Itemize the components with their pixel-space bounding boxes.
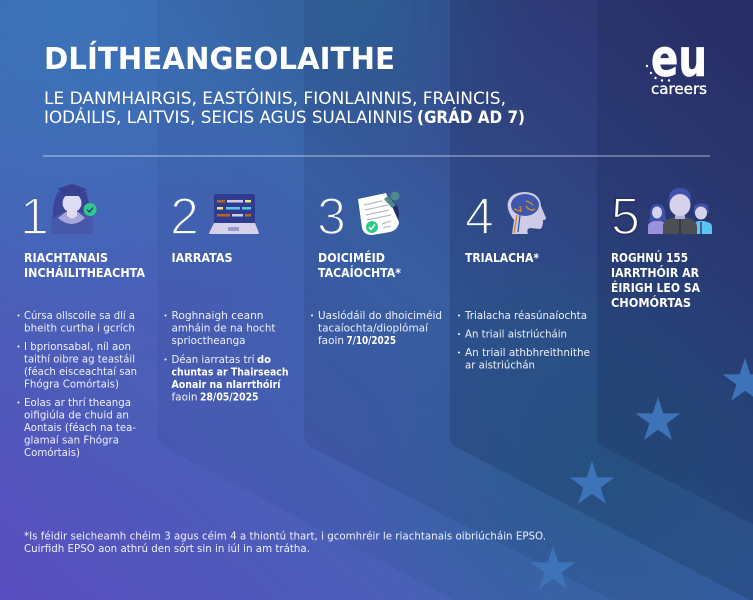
list: step 1: glamaí san Fhógra	[24, 434, 119, 446]
footnote: Cuirfidh EPSO aon athrú den sórt sin in iúl in am trátha.	[24, 543, 310, 555]
subtitle: LE DANMHAIRGIS, EASTÓINIS, FIONLAINNIS, FRAINCIS,	[44, 89, 506, 108]
list: step 3: faoin	[318, 335, 344, 347]
list: step 2: chuntas ar Thairseach	[172, 366, 288, 378]
step 2	[164, 188, 288, 404]
icon: head with brain	[508, 192, 546, 234]
number 2: 2	[170, 188, 199, 246]
list: step 1: Eolas ar thrí theanga	[24, 397, 131, 409]
heading: roghnú: IARRTHÓIR AR	[611, 265, 699, 280]
list: step 3: Uaslódáil do dhoiciméid	[318, 310, 442, 322]
footnote	[24, 530, 546, 555]
title: DLÍTHEANGEOLAITHE	[44, 41, 395, 77]
heading: doiciméid	[318, 250, 402, 280]
star 3	[570, 461, 614, 504]
list: step 3: 7/10/2025	[346, 335, 396, 347]
list: step 2: Déan iarratas trí	[172, 354, 256, 366]
logo: eu careers	[646, 29, 707, 98]
heading: riachtanais: INCHÁILITHEACHTA	[24, 265, 146, 280]
step 3	[311, 188, 442, 347]
list: step 3	[311, 310, 442, 347]
subtitle: IODÁILIS, LAITVIS, SEICIS AGUS SUALAINNIS	[44, 108, 413, 127]
logo: eu careers: eu	[651, 29, 707, 89]
heading: doiciméid: TACAÍOCHTA*	[318, 265, 402, 280]
subtitle: (GRÁD AD 7)	[417, 108, 525, 127]
icon: three people	[648, 188, 712, 234]
panel: column shade 2	[157, 0, 753, 600]
step 5	[611, 188, 712, 310]
list: step 1: (féach eisceachtaí san	[24, 366, 137, 378]
heading: trialacha: TRIALACHA*	[465, 251, 540, 265]
panel: column shade 4	[450, 0, 753, 600]
list: step 1: Aontais (féach na tea-	[24, 422, 136, 434]
number 3: 3	[317, 188, 346, 246]
list: step 1: oifigiúla de chuid an	[24, 410, 129, 422]
list: step 1: bheith curtha i gcrích	[24, 322, 135, 334]
heading: doiciméid: DOICIMÉID	[318, 250, 385, 265]
heading: roghnú: CHOMÓRTAS	[611, 295, 691, 310]
list: step 1: I bprionsabal, níl aon	[24, 341, 131, 353]
heading: iarratas: IARRATAS	[172, 251, 232, 265]
list: step 2: 28/05/2025	[200, 392, 258, 404]
star 1	[722, 358, 753, 401]
star 2	[636, 397, 680, 440]
icon: document	[358, 192, 400, 235]
heading: riachtanais	[24, 251, 146, 280]
star 4	[530, 546, 576, 589]
icon: graduate	[51, 184, 96, 234]
number 5: 5	[611, 188, 640, 246]
list: step 2: Roghnaigh ceann	[172, 310, 264, 322]
step 4	[458, 188, 590, 372]
list: step 2: do	[257, 354, 271, 366]
list: step 3: tacaíochta/dioplómaí	[318, 322, 429, 334]
heading: riachtanais: RIACHTANAIS	[24, 251, 108, 265]
heading: roghnú: ÉIRIGH LEO SA	[611, 280, 701, 295]
panel: column shade 3	[304, 0, 753, 600]
list: step 4: ar aistriúchán	[465, 360, 535, 372]
number 4: 4	[465, 188, 494, 246]
list: step 4: An triail aistriúcháin	[465, 328, 567, 340]
step 1	[18, 184, 146, 459]
heading: roghnú	[611, 250, 701, 310]
list: step 1	[18, 310, 137, 459]
list: step 1: Cúrsa ollscoile sa dlí a	[24, 310, 135, 322]
heading: roghnú: ROGHNÚ 155	[611, 250, 688, 265]
list: step 2	[164, 310, 288, 404]
list: step 4	[458, 310, 590, 372]
footnote: *Is féidir seicheamh chéim 3 agus céim 4 a thiontú thart, i gcomhréir le riachtanais oibriúcháin EPSO.	[24, 530, 546, 542]
list: step 1: taithí oibre ag teastáil	[24, 354, 135, 366]
list: step 1: Fhógra Comórtais)	[24, 378, 119, 390]
list: step 2: amháin de na hocht	[172, 322, 276, 334]
subtitle	[44, 89, 525, 127]
logo: eu careers: careers	[651, 80, 707, 98]
icon: laptop	[209, 194, 259, 234]
list: step 4: An triail athbhreithnithe	[465, 347, 590, 359]
list: step 2: faoin	[172, 392, 198, 404]
list: step 2: sprioctheanga	[172, 335, 246, 347]
list: step 4: Trialacha réasúnaíochta	[464, 310, 587, 322]
list: step 1: Comórtais)	[24, 447, 80, 459]
number 1: 1	[20, 188, 49, 246]
list: step 2: Aonair na nIarrthóirí	[172, 379, 281, 391]
panel: column shade 5	[597, 0, 753, 524]
